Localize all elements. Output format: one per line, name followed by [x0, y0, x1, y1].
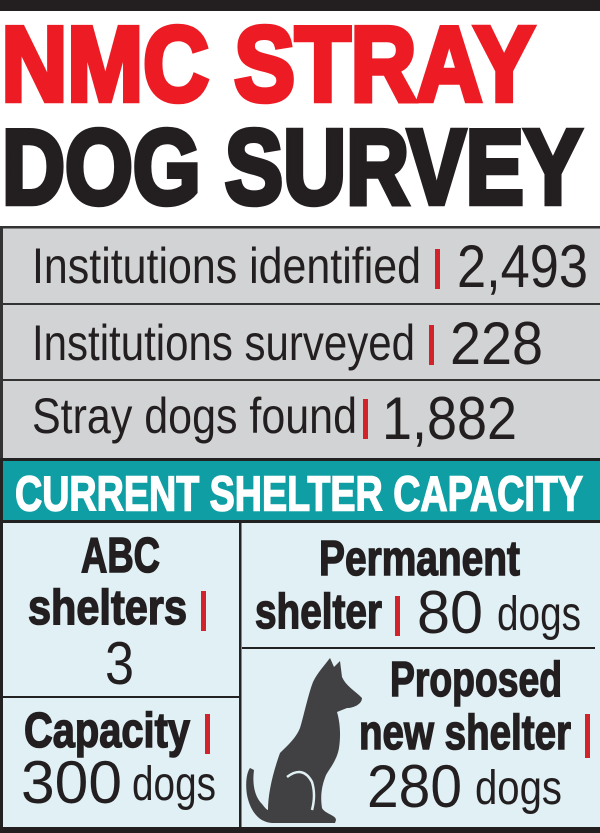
permanent shelter: shelter [255, 585, 382, 639]
capacity: Capacity [24, 704, 190, 758]
permanent shelter: 80 [417, 579, 483, 646]
permanent shelter: dogs [497, 588, 581, 641]
row: stray dogs found [32, 385, 517, 452]
row: institutions surveyed: 228 [450, 310, 543, 377]
proposed new shelter [359, 653, 590, 820]
capacity: dogs [132, 758, 216, 811]
proposed new shelter: dogs [475, 762, 562, 815]
row: institutions surveyed: Institutions surveyed [32, 315, 415, 371]
panel: survey statistics [0, 226, 600, 461]
title [2, 6, 582, 226]
ABC shelters: ABC [81, 529, 160, 583]
proposed new shelter: 280 [367, 753, 462, 820]
row: stray dogs found: 1,882 [382, 385, 517, 452]
ABC shelters [28, 529, 206, 697]
capacity: 300 [21, 749, 122, 816]
ABC shelters: shelters [28, 581, 187, 635]
icon: sitting dog [246, 658, 362, 823]
ABC shelters: 3 [105, 630, 134, 697]
panel: shelter details [0, 461, 600, 828]
permanent shelter [255, 532, 581, 646]
row: institutions identified [32, 233, 588, 300]
capacity [21, 704, 216, 816]
row: institutions identified: Institutions identified [32, 238, 421, 294]
permanent shelter: Permanent [319, 532, 520, 586]
row: stray dogs found: Stray dogs found [32, 388, 357, 444]
